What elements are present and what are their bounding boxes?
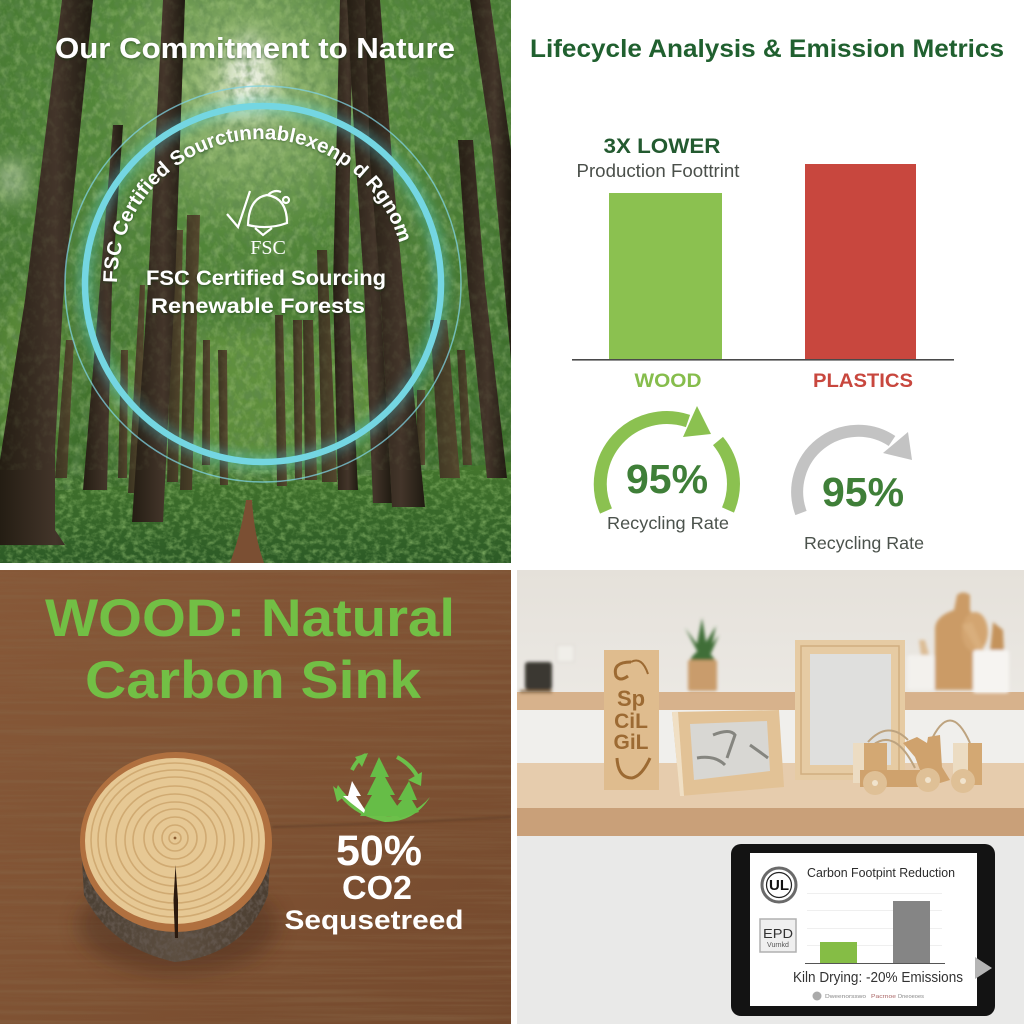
tablet bar chart [805, 893, 945, 964]
stat: CO2 sequestered [284, 827, 464, 935]
FSC caption: FSC Certified Sourcing [146, 267, 386, 290]
callout: 3x lower [576, 135, 740, 181]
tablet [731, 844, 995, 1016]
callout: 3x lower: Production Foottrint [576, 161, 740, 181]
toy wooden car [853, 720, 982, 795]
bar chart: WOOD [634, 371, 702, 392]
heading: WOOD: Natural [45, 589, 455, 648]
tablet heading: Carbon Footpint Reduction [807, 866, 955, 880]
wood recycling gauge: Recycling Rate [607, 513, 729, 533]
callout: 3x lower: 3X LOWER [604, 135, 720, 158]
forest floor [0, 462, 511, 563]
plaque: engraved wood sign: GiL [614, 731, 649, 754]
wood recycling gauge: 95% [626, 456, 708, 502]
heading: Lifecycle Analysis & Emission Metrics [530, 35, 1004, 63]
icon: trees and cycle arrows [333, 753, 430, 822]
EPD badge: Vurnkd [767, 942, 789, 949]
plaque: engraved wood sign: CiL [614, 710, 648, 733]
FSC caption: Renewable Forests [151, 295, 365, 318]
heading [45, 598, 452, 698]
foreground trunks [0, 0, 511, 545]
panel: wood carbon sink [0, 570, 511, 1024]
stat: CO2 sequestered: CO2 [342, 869, 412, 906]
title: Our Commitment to Nature [55, 33, 455, 65]
plastics recycling gauge: 95% [822, 469, 904, 515]
tablet footer [812, 992, 924, 1000]
bar chart: PLASTICS [813, 371, 913, 392]
panel: product photo [517, 570, 1024, 1024]
UL badge: UL [769, 877, 789, 894]
plastics recycling gauge: Recycling Rate [804, 533, 924, 553]
shelf items [520, 592, 1009, 693]
stat: CO2 sequestered: Sequsetreed [284, 905, 464, 935]
curved ring text: FSC Certified Sourctınnablexenp d Rgnom [102, 125, 410, 284]
plaque: engraved wood sign: Sp [617, 686, 645, 711]
icon: FSC check and tree mark [227, 191, 289, 235]
FSC label: FSC [250, 237, 286, 259]
illustration: tree stump [78, 752, 278, 973]
tablet footer: Pacrnoe [871, 994, 896, 1000]
photo frame [672, 710, 784, 796]
panel: lifecycle metrics [517, 0, 1024, 563]
FSC caption [146, 267, 386, 318]
wood recycling gauge [600, 406, 733, 533]
glowing ring [65, 86, 461, 482]
tall empty frame [795, 640, 905, 780]
bar chart [572, 164, 954, 392]
tablet footer: Dweenorsswo [825, 994, 866, 1000]
UL badge [762, 868, 796, 902]
panel: forest commitment [0, 0, 511, 563]
EPD badge: EPD [763, 926, 793, 941]
stat: CO2 sequestered: 50% [336, 827, 422, 875]
tablet caption: Kiln Drying: -20% Emissions [793, 970, 963, 986]
heading: Carbon Sink [85, 651, 422, 710]
tablet footer: Dneoeoes [898, 994, 924, 1000]
EPD badge [760, 919, 796, 952]
plaque: engraved wood sign [604, 650, 659, 790]
background trunks [55, 215, 472, 493]
plastics recycling gauge [797, 431, 924, 553]
